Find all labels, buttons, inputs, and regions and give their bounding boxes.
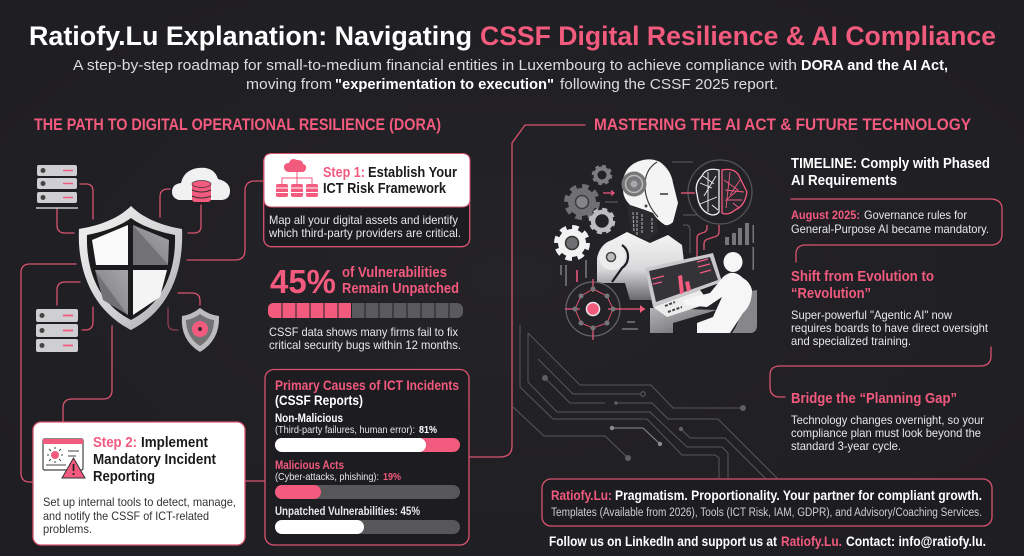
- icon: main shield: [79, 206, 182, 330]
- panel: step 1: [264, 154, 470, 247]
- step 2 text: Set up internal tools to detect, manage,: [43, 495, 236, 509]
- bar: malicious 19%: 19%: [383, 471, 402, 483]
- causes heading: Primary Causes of ICT Incidents: [275, 378, 459, 393]
- bar: non-malicious 81%: (Third-party failures, human error):: [275, 424, 415, 436]
- bar: non-malicious 81%: 81%: [419, 424, 438, 436]
- timeline item: shift to revolution: Shift from Evolution to: [791, 268, 934, 285]
- icon: cloud database: [172, 168, 230, 202]
- panel: causes of ICT incidents: [265, 370, 469, 545]
- timeline item: August 2025: Governance rules for: [864, 208, 967, 222]
- bar: unpatched 45%: [275, 506, 460, 534]
- stat: 45% unpatched: CSSF data shows many firms fail to fix: [269, 325, 458, 339]
- icon: network hub: [561, 260, 645, 340]
- subtitle: DORA and the AI Act,: [801, 57, 948, 74]
- bar: unpatched 45%: Unpatched Vulnerabilities: 45%: [275, 506, 420, 518]
- timeline item: planning gap: standard 3-year cycle.: [791, 439, 901, 453]
- footer contact line: Follow us on LinkedIn and support us at: [549, 533, 777, 549]
- footer contact line: Contact: info@ratiofy.lu.: [846, 533, 986, 549]
- illustration: robot and human at computer: [556, 159, 757, 340]
- step 1 heading: [323, 165, 457, 197]
- timeline item: planning gap: compliance plan must look beyond the: [791, 426, 981, 440]
- step 2 text: problems.: [43, 522, 92, 536]
- title: Ratiofy.Lu Explanation: Navigating: [29, 21, 472, 51]
- connector lines: DORA flow: [21, 125, 585, 482]
- stat: 45% unpatched: 45%: [270, 263, 336, 300]
- stat: 45% unpatched: of Vulnerabilities: [342, 265, 447, 281]
- timeline item: August 2025: [791, 208, 989, 236]
- icon: gears: [556, 166, 618, 258]
- icon: robot body: [597, 159, 684, 300]
- title: [29, 21, 996, 51]
- circuit background pattern: [513, 325, 777, 478]
- footer contact line: Ratiofy.Lu.: [781, 533, 842, 549]
- timeline item: planning gap: [791, 390, 984, 453]
- icon: small shield: [182, 308, 219, 352]
- timeline item: planning gap: Technology changes overnight, so your: [791, 413, 984, 427]
- stat: 45% unpatched: [268, 263, 463, 352]
- panel: Ratiofy.Lu value proposition: [542, 479, 992, 526]
- segmented progress bar: [268, 303, 463, 318]
- stat: 45% unpatched: Remain Unpatched: [342, 281, 459, 297]
- step 2 heading: Implement: [141, 435, 208, 451]
- bar: non-malicious 81%: [275, 413, 460, 452]
- timeline item: shift to revolution: requires boards to have direct oversight: [791, 321, 989, 335]
- step 1 heading: ICT Risk Framework: [323, 181, 447, 197]
- icon: server stack top: [36, 165, 78, 208]
- step 1 text: Map all your digital assets and identify: [269, 213, 458, 227]
- step 2 heading: [93, 435, 216, 485]
- timeline item: shift to revolution: “Revolution”: [791, 285, 871, 302]
- step 1 text: which third-party providers are critical.: [268, 226, 461, 240]
- step 2 heading: Mandatory Incident: [93, 452, 216, 468]
- step 1 text: [268, 213, 461, 240]
- heading: DORA section: THE PATH TO DIGITAL OPERATIONAL RESILIENCE (DORA): [34, 116, 441, 134]
- bar: malicious 19%: Malicious Acts: [275, 460, 344, 472]
- timeline item: August 2025: General-Purpose AI became mandatory.: [791, 222, 989, 236]
- subtitle: A step-by-step roadmap for small-to-medium financial entities in Luxembourg to achieve compliance with: [73, 57, 797, 74]
- footer contact line: [549, 533, 986, 549]
- step 2 heading: Step 2:: [93, 435, 137, 451]
- causes heading: (CSSF Reports): [275, 393, 363, 408]
- causes heading: [275, 378, 459, 408]
- timeline item: shift to revolution: [791, 268, 989, 348]
- subtitle: following the CSSF 2025 report.: [560, 76, 778, 93]
- bar: malicious 19%: [275, 460, 460, 499]
- timeline item: planning gap: Bridge the “Planning Gap”: [791, 390, 957, 407]
- panel: step 2: [33, 422, 245, 545]
- step 1 heading: Step 1:: [323, 165, 365, 181]
- subtitle: "experimentation to execution": [335, 76, 554, 93]
- connector lines: timeline: [770, 199, 1002, 397]
- icon: server stack bottom: [36, 309, 78, 352]
- icon: AI brain: [672, 160, 752, 257]
- title: CSSF Digital Resilience & AI Compliance: [480, 21, 996, 51]
- timeline item: shift to revolution: Super-powerful "Agentic AI" now: [791, 308, 952, 322]
- stat: 45% unpatched: critical security bugs within 12 months.: [269, 338, 461, 352]
- heading: AI Act section: MASTERING THE AI ACT & FUTURE TECHNOLOGY: [594, 116, 971, 134]
- timeline item: August 2025: August 2025:: [791, 208, 860, 222]
- subtitle: [73, 57, 948, 93]
- icon: human operator: [683, 252, 757, 333]
- step 2 text: [43, 495, 236, 536]
- step 2 heading: Reporting: [93, 469, 155, 485]
- icon: ICT risk framework: [276, 159, 318, 197]
- step 2 text: and notify the CSSF of ICT-related: [43, 509, 209, 523]
- timeline heading: AI Requirements: [791, 173, 897, 189]
- timeline heading: [791, 156, 990, 189]
- step 1 heading: Establish Your: [368, 165, 457, 181]
- icon: computer terminal: [645, 253, 722, 333]
- bar: malicious 19%: (Cyber-attacks, phishing):: [275, 471, 379, 483]
- icon: small bars: [725, 223, 754, 270]
- panel: Ratiofy.Lu value proposition: Ratiofy.Lu:: [551, 487, 612, 503]
- timeline heading: TIMELINE: Comply with Phased: [791, 156, 990, 172]
- icon: incident alert window: [43, 439, 85, 478]
- subtitle: moving from: [246, 76, 332, 93]
- bar: non-malicious 81%: Non-Malicious: [275, 413, 343, 425]
- timeline item: shift to revolution: and specialized training.: [791, 334, 911, 348]
